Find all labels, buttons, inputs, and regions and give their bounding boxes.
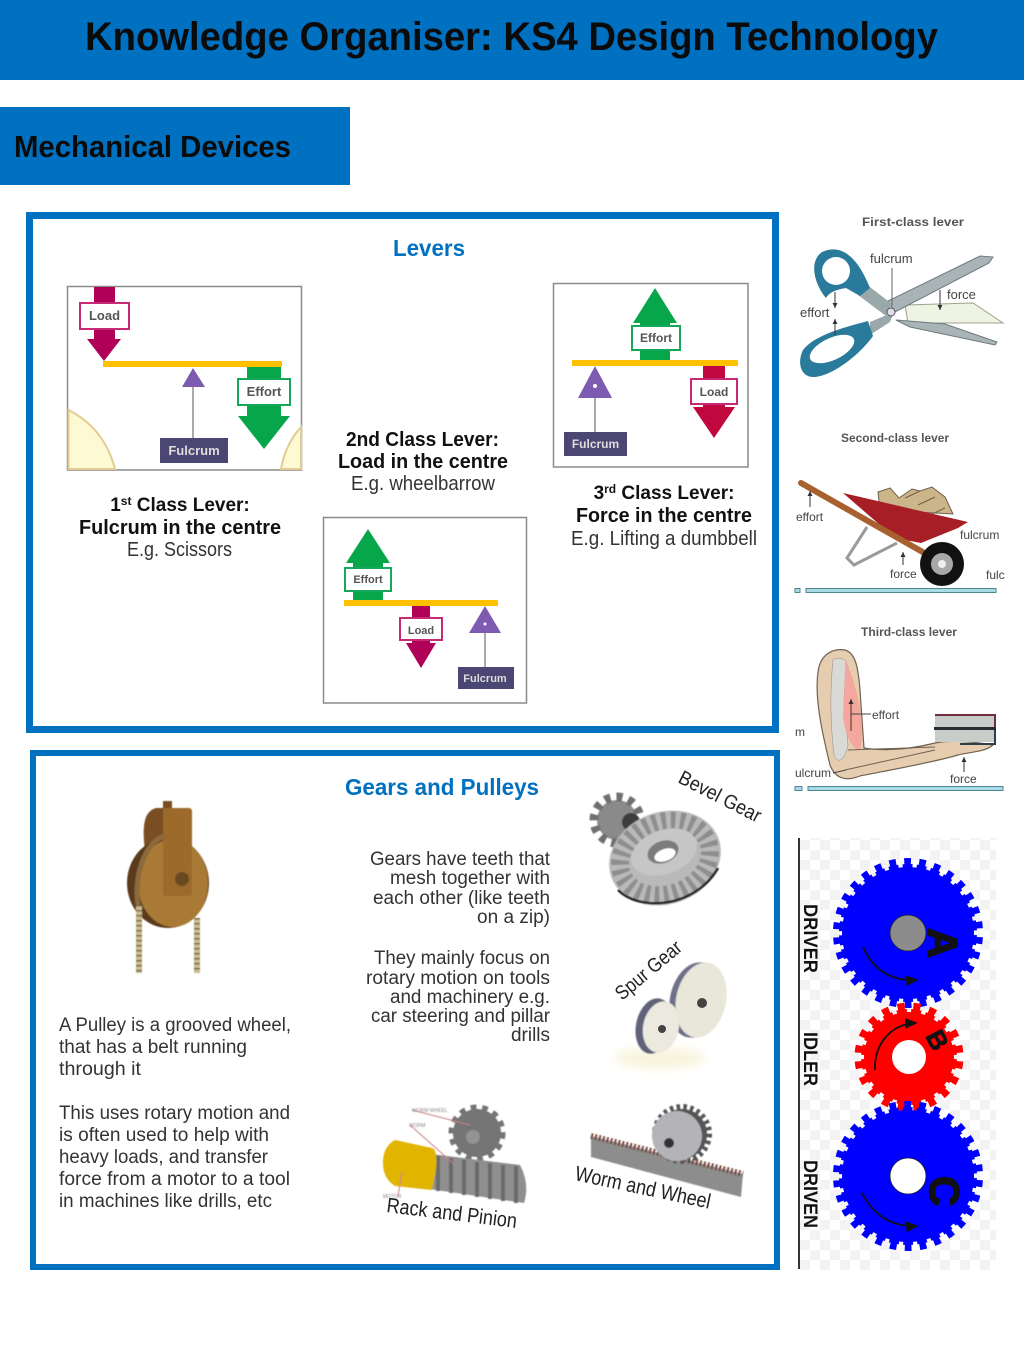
heading: Gears and Pulleys: Gears and Pulleys [345, 774, 539, 800]
caption: third class lever: Force in the centre [576, 505, 752, 527]
caption: second class lever [338, 429, 508, 495]
text: gears explanation: rotary motion on tools [366, 968, 550, 989]
text: gears explanation [366, 849, 551, 1046]
diagram: third class lever: Effort [640, 331, 672, 345]
diagram: second class lever: Effort [353, 574, 383, 586]
gear C: C [921, 1176, 968, 1206]
gear A [837, 862, 979, 1004]
figure: second-class lever wheelbarrow: force [890, 567, 917, 581]
text: pulley explanation: A Pulley is a grooved wheel, [59, 1015, 291, 1036]
panel: levers [30, 216, 776, 730]
diagram: second class lever [324, 518, 526, 703]
diagram: third class lever: Load [700, 385, 728, 399]
text: pulley explanation: force from a motor to a tool [59, 1169, 290, 1190]
section heading: Mechanical Devices [0, 107, 350, 185]
gear A: A [919, 928, 966, 958]
text: gears explanation: and machinery e.g. [390, 987, 550, 1008]
image: worm gear with motor [383, 1107, 526, 1203]
gear B [859, 1007, 959, 1107]
panel: gears and pulleys [33, 753, 777, 1267]
diagram: second class lever: Fulcrum [463, 673, 507, 685]
label: driven: DRIVEN [799, 1160, 820, 1228]
gear C [837, 1105, 979, 1247]
text: pulley explanation: heavy loads, and transfer [59, 1147, 269, 1168]
caption: first class lever: st [121, 494, 131, 508]
figure: second-class lever wheelbarrow: fulcrum [960, 528, 999, 542]
label: worm and wheel: Worm and Wheel [573, 1162, 713, 1214]
figure: third-class lever arm: Third-class lever [861, 625, 957, 639]
figure: third-class lever arm: effort [872, 708, 900, 722]
figure: first-class lever scissors [800, 215, 1003, 377]
text: gears explanation: each other (like teeth [373, 888, 550, 909]
figure: second-class lever wheelbarrow: effort [796, 510, 824, 524]
image: bevel gear [594, 795, 734, 921]
caption: third class lever: 3 [594, 483, 604, 504]
title: Knowledge Organiser: KS4 Design Technology [85, 15, 939, 59]
figure: second-class lever wheelbarrow: fulc [986, 568, 1005, 582]
caption: third class lever: rd [604, 482, 616, 496]
text: gears explanation: car steering and pillar [371, 1006, 551, 1027]
diagram: first class lever: Load [89, 308, 120, 323]
diagram: third class lever: Fulcrum [572, 437, 619, 451]
figure: first-class lever scissors: First-class lever [862, 215, 964, 229]
caption: third class lever: Class Lever: [616, 483, 734, 504]
image: pulley [127, 801, 209, 973]
section heading: Mechanical Devices: Mechanical Devices [14, 129, 291, 164]
caption: first class lever: Class Lever: [131, 495, 250, 516]
caption: second class lever: 2nd Class Lever: [346, 429, 499, 451]
figure: second-class lever wheelbarrow [795, 431, 1005, 592]
diagram: second class lever: Load [408, 625, 434, 637]
diagram: first class lever [68, 286, 302, 470]
diagram: first class lever: Effort [247, 384, 282, 399]
caption: second class lever: Load in the centre [338, 451, 508, 473]
caption: first class lever [79, 494, 281, 561]
caption: first class lever: 1 [110, 495, 121, 516]
figure: third-class lever arm [795, 625, 1003, 790]
figure: first-class lever scissors: fulcrum [870, 251, 913, 266]
caption: first class lever: E.g. Scissors [127, 539, 232, 561]
figure: second-class lever wheelbarrow: Second-class lever [841, 431, 949, 445]
figure: gear train [799, 838, 996, 1270]
label: rack and pinion: Rack and Pinion [385, 1194, 518, 1233]
text: gears explanation: on a zip) [477, 907, 550, 928]
text: pulley explanation: in machines like drills, etc [59, 1191, 272, 1212]
label: idler: IDLER [799, 1032, 820, 1086]
caption: second class lever: E.g. wheelbarrow [351, 473, 496, 495]
text: pulley explanation: that has a belt running [59, 1037, 247, 1058]
text: gears explanation: Gears have teeth that [370, 849, 551, 870]
text: gears explanation: They mainly focus on [374, 948, 550, 969]
label: driver: DRIVER [799, 904, 820, 973]
diagram: first class lever: Fulcrum [168, 443, 220, 458]
figure: third-class lever arm: ulcrum [795, 766, 831, 780]
label: bevel gear: Bevel Gear [675, 767, 765, 827]
text: pulley explanation: through it [59, 1059, 142, 1080]
image: worm gear with motor: MOTOR [383, 1194, 402, 1200]
caption: first class lever: Fulcrum in the centre [79, 517, 281, 539]
figure: third-class lever arm: m [795, 725, 805, 739]
text: pulley explanation: is often used to help with [59, 1125, 269, 1146]
label: spur gear: Spur Gear [611, 936, 687, 1005]
heading: Levers: Levers [393, 235, 465, 261]
image: worm gear with motor: WORM [409, 1123, 425, 1129]
text: pulley explanation: This uses rotary motion and [59, 1103, 290, 1124]
title banner [0, 0, 1024, 80]
caption: third class lever: E.g. Lifting a dumbbell [571, 528, 757, 550]
figure: third-class lever arm: force [950, 772, 977, 786]
caption: third class lever [571, 482, 757, 550]
text: gears explanation: mesh together with [390, 868, 550, 889]
text: gears explanation: drills [511, 1025, 550, 1046]
text: pulley explanation [59, 1015, 291, 1212]
figure: first-class lever scissors: force [947, 287, 976, 302]
gear B: B [920, 1025, 955, 1055]
image: spur gear [615, 958, 733, 1069]
figure: first-class lever scissors: effort [800, 305, 830, 320]
diagram: third class lever [554, 284, 748, 467]
image: worm gear with motor: WORM WHEEL [412, 1108, 448, 1114]
image: rack and wheel [591, 1107, 743, 1197]
